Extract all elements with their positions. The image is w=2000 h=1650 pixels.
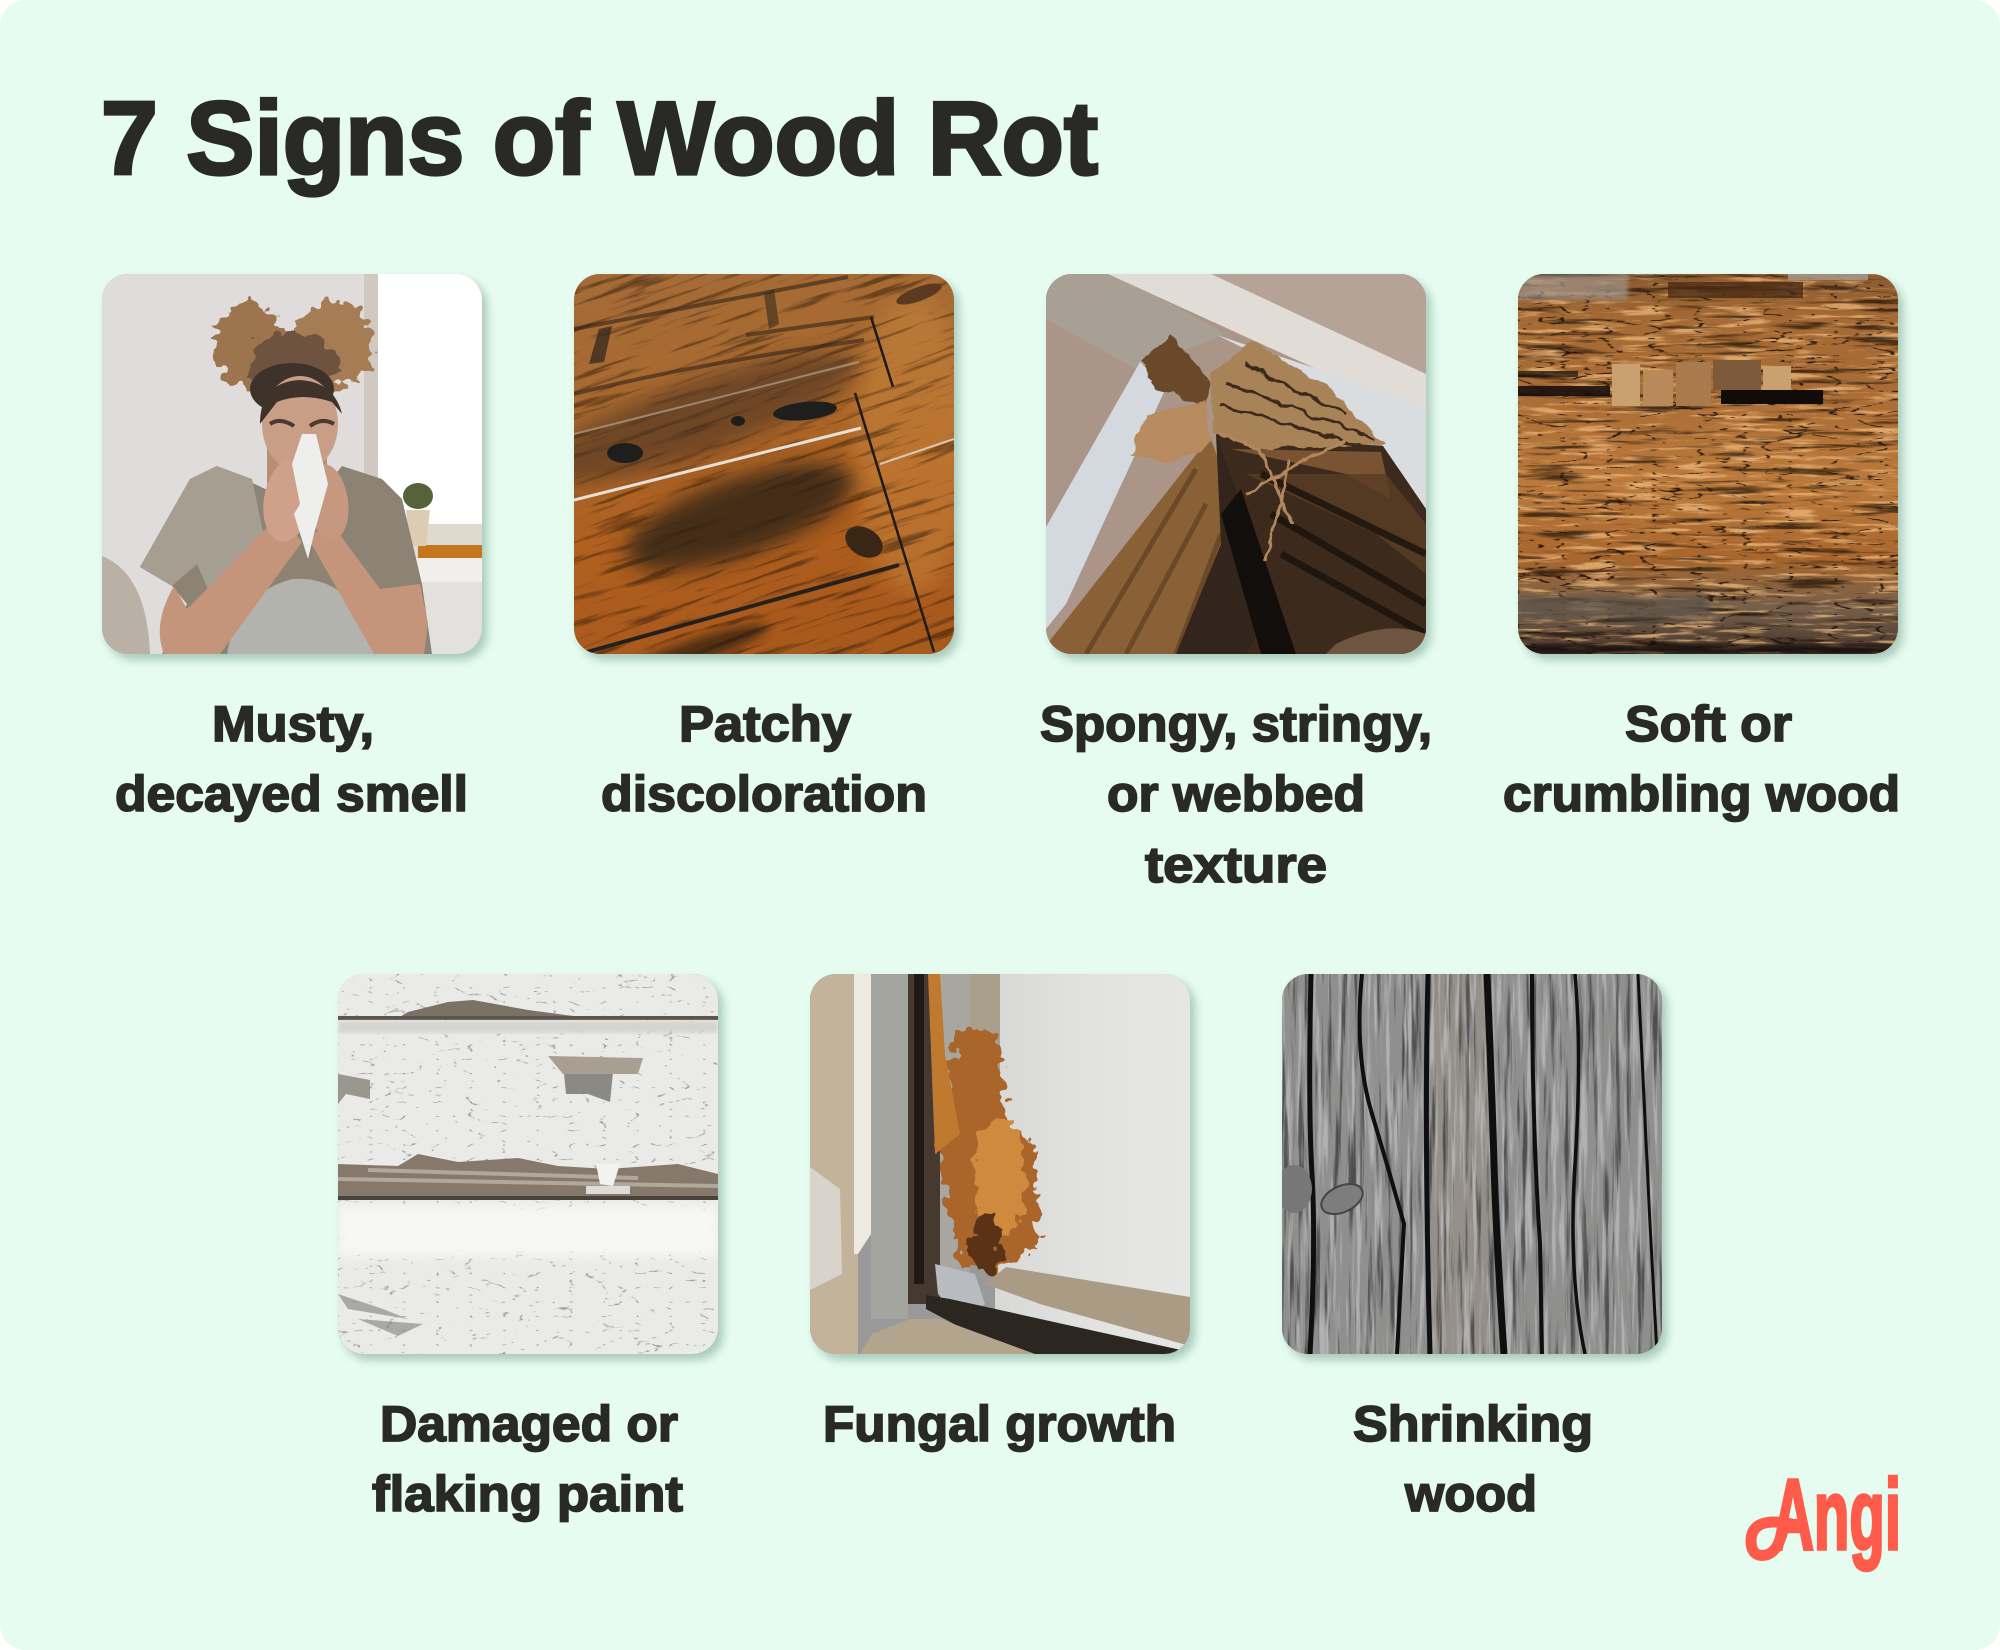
photo: rust-orange fungus in a window frame — [810, 974, 1190, 1354]
photo: stained wood floor — [574, 274, 954, 654]
photo: woman blowing her nose into a tissue — [102, 274, 482, 654]
label: Damaged or flaking paint: Damaged or — [380, 1396, 678, 1452]
label: Spongy, stringy, or webbed texture — [1040, 696, 1432, 893]
panel: musty, decayed smell — [102, 274, 492, 822]
label: Soft or crumbling wood: crumbling wood — [1503, 766, 1900, 822]
photo: splintered corner of a fascia board — [1046, 274, 1426, 654]
photo: crumbling rotten wood — [1518, 274, 1898, 654]
panel: shrinking wood — [1282, 974, 1672, 1522]
panel: damaged or flaking paint — [338, 974, 728, 1522]
label: Damaged or flaking paint — [372, 1396, 684, 1522]
label: Spongy, stringy, or webbed texture: Spongy, stringy, — [1040, 696, 1432, 752]
label: Fungal growth: Fungal growth — [823, 1396, 1176, 1452]
label: Shrinking wood: wood — [1404, 1466, 1537, 1522]
label: Musty, decayed smell: decayed smell — [115, 766, 468, 822]
label: Patchy discoloration — [601, 696, 927, 822]
label: Spongy, stringy, or webbed texture: or webbed — [1107, 766, 1365, 822]
label: Patchy discoloration: Patchy — [679, 696, 851, 752]
label: Musty, decayed smell — [115, 696, 468, 822]
label: Soft or crumbling wood: Soft or — [1625, 696, 1792, 752]
panel: fungal growth — [810, 974, 1200, 1452]
panel: patchy discoloration — [574, 274, 964, 822]
label: Damaged or flaking paint: flaking paint — [372, 1466, 683, 1522]
panel: soft or crumbling wood — [1503, 274, 1908, 822]
title: 7 Signs of Wood Rot — [101, 81, 1098, 197]
panel: spongy, stringy, or webbed texture — [1040, 274, 1436, 893]
label: Patchy discoloration: discoloration — [601, 766, 927, 822]
label: Musty, decayed smell: Musty, — [212, 696, 374, 752]
label: Spongy, stringy, or webbed texture: texture — [1145, 837, 1327, 893]
photo: weathered grey boards with gaps — [1282, 974, 1662, 1354]
photo: flaking white paint on siding — [338, 974, 718, 1354]
label: Shrinking wood — [1353, 1396, 1593, 1522]
label: Shrinking wood: Shrinking — [1353, 1396, 1593, 1452]
label: Soft or crumbling wood — [1503, 696, 1900, 822]
